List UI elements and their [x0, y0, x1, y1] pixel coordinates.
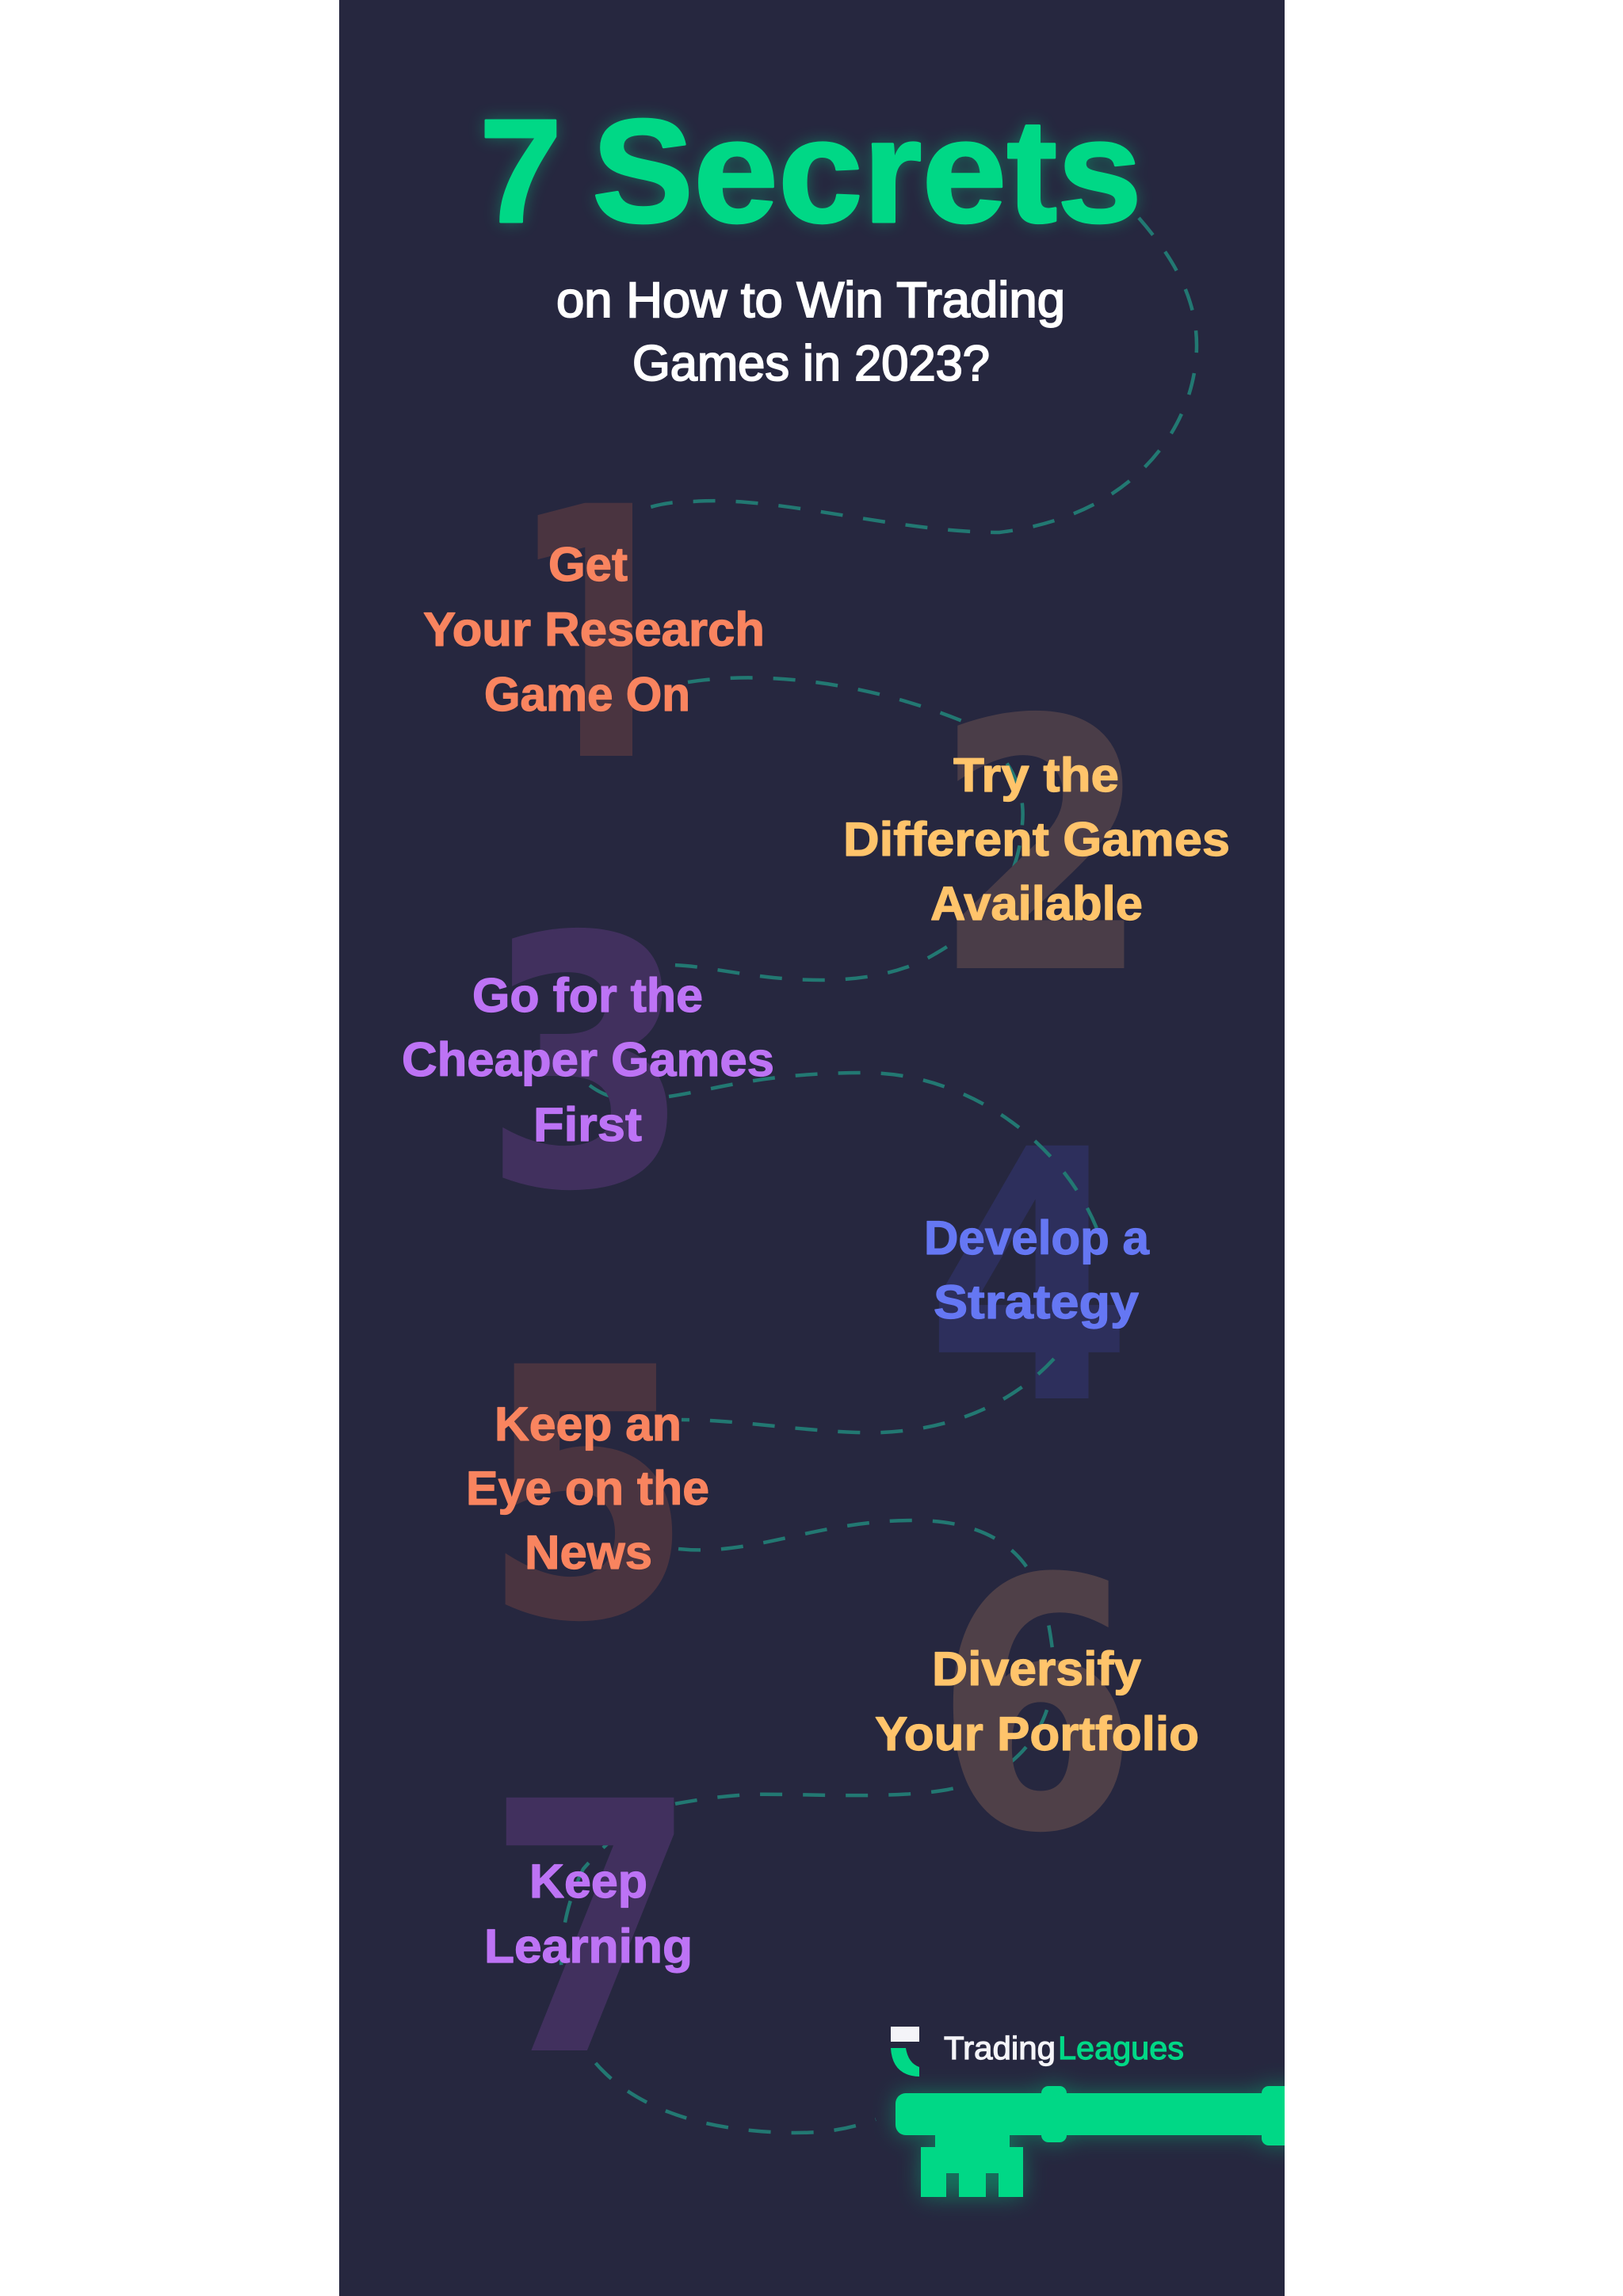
title: 7	[479, 90, 562, 254]
step 1 label	[423, 538, 765, 721]
step 7 label	[484, 1855, 693, 1973]
number 5: 5	[482, 1295, 693, 1699]
step 6 label: Your Portfolio	[875, 1707, 1199, 1760]
wordmark: Trading	[944, 2030, 1056, 2066]
step 1 label: Your Research	[423, 603, 765, 656]
dashed route line	[561, 218, 1197, 2133]
step 5 label: News	[525, 1526, 652, 1579]
step 6 label: Diversify	[932, 1642, 1142, 1695]
logo: TradingLeagues	[891, 2027, 1184, 2077]
step 3 label: First	[533, 1098, 642, 1151]
title: Secrets	[592, 90, 1142, 254]
step 1 label: Game On	[484, 668, 690, 721]
step 2 label: Try the	[953, 749, 1119, 802]
title: 7	[479, 90, 562, 254]
number 4: 4	[926, 1077, 1133, 1481]
step 5 label	[466, 1398, 709, 1579]
step 7 label: Learning	[484, 1920, 693, 1973]
step 5 label: Eye on the	[466, 1462, 709, 1515]
subtitle: on How to Win Trading	[556, 273, 1065, 328]
step 5 label: Keep an	[495, 1398, 682, 1451]
title: Secrets	[592, 90, 1142, 254]
icon: logo mark	[891, 2027, 919, 2077]
dashed route line around step 4	[669, 1073, 1098, 1432]
number 3: 3	[483, 864, 691, 1268]
number 2: 2	[932, 646, 1151, 1051]
step 3 label: Go for the	[472, 969, 703, 1022]
step 4 label	[924, 1211, 1150, 1329]
step 2 label: Available	[930, 877, 1143, 930]
icon: green key	[896, 2086, 1301, 2197]
wordmark	[944, 2030, 1184, 2066]
number 1: 1	[506, 434, 700, 838]
step 2 label	[843, 749, 1230, 930]
panel: dark background	[339, 0, 1285, 2296]
subtitle: Games in 2023?	[632, 336, 990, 391]
step 6 label	[875, 1642, 1199, 1760]
subtitle	[556, 273, 1065, 391]
step 3 label	[402, 969, 774, 1151]
step 2 label: Different Games	[843, 813, 1230, 866]
step 7 label: Keep	[529, 1855, 647, 1908]
number 6: 6	[935, 1505, 1138, 1909]
number 7: 7	[486, 1729, 698, 2133]
step 4 label: Strategy	[934, 1276, 1140, 1329]
step 3 label: Cheaper Games	[402, 1033, 774, 1086]
wordmark: Leagues	[1058, 2030, 1184, 2066]
step 4 label: Develop a	[924, 1211, 1150, 1264]
step 1 label: Get	[548, 538, 628, 591]
